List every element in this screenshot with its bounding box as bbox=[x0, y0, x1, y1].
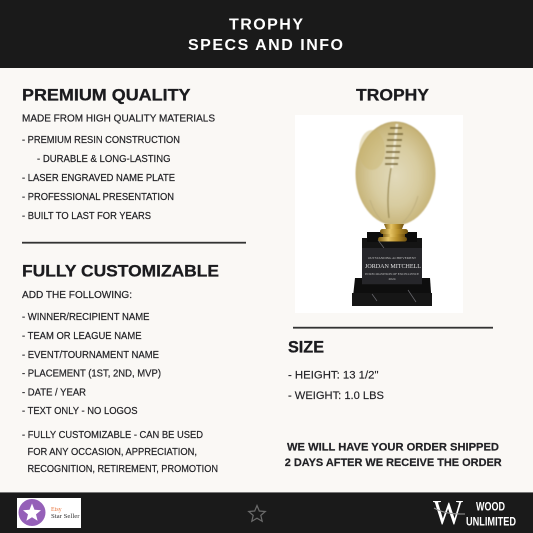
header band bbox=[0, 0, 533, 68]
name plate: 2024 bbox=[388, 277, 396, 281]
panel: trophy photo bbox=[295, 115, 463, 313]
panel: size bbox=[288, 338, 384, 402]
text block: customization list: - TEAM OR LEAGUE NAME bbox=[22, 331, 142, 342]
text block: quality list: MADE FROM HIGH QUALITY MATERIALS bbox=[22, 114, 215, 124]
icon: football bbox=[356, 122, 436, 226]
heading: fully customizable: FULLY CUSTOMIZABLE bbox=[22, 262, 219, 281]
badge: etsy star seller bbox=[17, 498, 81, 528]
text block: customization list bbox=[22, 290, 218, 475]
name plate: OUTSTANDING ACHIEVEMENT bbox=[368, 256, 417, 260]
logo: wood unlimited: W bbox=[433, 493, 463, 532]
header title: SPECS AND INFO bbox=[188, 37, 343, 54]
footer band bbox=[0, 492, 533, 533]
header title bbox=[188, 16, 343, 54]
callout: shipping notice: 2 DAYS AFTER WE RECEIVE THE ORDER bbox=[285, 457, 502, 469]
text block: customization list: - FULLY CUSTOMIZABLE - CAN BE USED bbox=[22, 430, 203, 441]
badge: etsy star seller: Etsy bbox=[51, 507, 62, 513]
text block: quality list: - DURABLE & LONG-LASTING bbox=[37, 154, 171, 165]
text block: quality list: - LASER ENGRAVED NAME PLATE bbox=[22, 173, 175, 184]
text block: quality list: - PROFESSIONAL PRESENTATION bbox=[22, 192, 174, 203]
text block: customization list: ADD THE FOLLOWING: bbox=[22, 290, 132, 301]
text block: customization list: - PLACEMENT (1ST, 2ND, MVP) bbox=[22, 369, 161, 380]
text block: customization list: - WINNER/RECIPIENT NAME bbox=[22, 312, 150, 323]
header title: TROPHY bbox=[229, 16, 303, 33]
text block: dimensions: - HEIGHT: 13 1/2" bbox=[288, 370, 379, 382]
text block: customization list: FOR ANY OCCASION, APPRECIATION, bbox=[28, 447, 197, 458]
heading: size: SIZE bbox=[288, 338, 324, 357]
callout: shipping notice bbox=[285, 442, 502, 469]
name plate: IN RECOGNITION OF EXCELLENCE bbox=[365, 272, 419, 276]
name plate: JORDAN MITCHELL bbox=[365, 263, 421, 270]
logo: wood unlimited: WOOD bbox=[476, 500, 505, 514]
icon: marble base bbox=[352, 232, 432, 306]
logo: wood unlimited: UNLIMITED bbox=[466, 514, 516, 528]
text block: customization list: - EVENT/TOURNAMENT NAME bbox=[22, 350, 159, 361]
name plate bbox=[362, 248, 422, 284]
panel: fully customizable bbox=[22, 262, 219, 475]
icon: gold stem bbox=[378, 224, 408, 242]
text block: customization list: RECOGNITION, RETIREMENT, PROMOTION bbox=[28, 464, 218, 475]
heading: premium quality: PREMIUM QUALITY bbox=[22, 86, 191, 104]
callout: shipping notice: WE WILL HAVE YOUR ORDER SHIPPED bbox=[287, 442, 499, 454]
text block: dimensions bbox=[288, 370, 384, 402]
icon: star outline bbox=[249, 506, 265, 521]
text block: dimensions: - WEIGHT: 1.0 LBS bbox=[288, 390, 384, 402]
logo: wood unlimited bbox=[433, 493, 516, 532]
badge: etsy star seller: Star Seller bbox=[51, 514, 80, 520]
text block: customization list: - TEXT ONLY - NO LOGOS bbox=[22, 406, 138, 417]
text block: quality list bbox=[22, 114, 215, 222]
panel: premium quality bbox=[22, 86, 215, 222]
text block: customization list: - DATE / YEAR bbox=[22, 388, 86, 398]
text block: quality list: - PREMIUM RESIN CONSTRUCTION bbox=[22, 135, 180, 146]
text block: quality list: - BUILT TO LAST FOR YEARS bbox=[22, 211, 151, 222]
heading: trophy: TROPHY bbox=[356, 86, 430, 104]
